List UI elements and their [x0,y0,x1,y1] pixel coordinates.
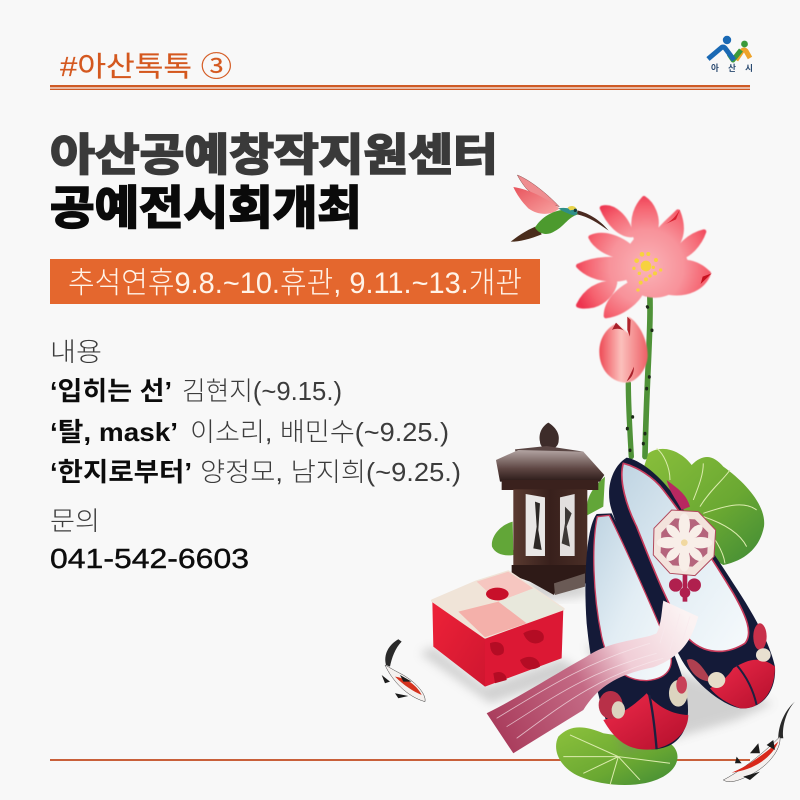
content heading: 내용 [50,337,102,367]
exhibition 3 [50,457,461,487]
holiday notice banner: 추석연휴9.8.~10.휴관, 9.11.~13.개관 [68,267,522,300]
exhibition 2: ‘탈, mask’ [50,417,178,447]
exhibition 3: 양정모, 남지희(~9.25.) [200,457,461,487]
title [50,131,498,234]
logo: Asan city [708,36,753,73]
title: 공예전시회개최 [50,182,362,234]
illustration: bottom composition [382,423,795,785]
lily pad under shoes [556,727,678,785]
gift box [420,572,583,703]
illustration: lotus bud [599,317,648,383]
stamens [632,252,662,292]
front shoe [585,513,688,750]
header double rule [50,85,750,90]
illustration: hummingbird [511,175,609,242]
koi fish right [723,702,795,782]
hashtag heading: #아산톡톡 ③ [60,51,232,82]
exhibition 1: 김현지(~9.15.) [182,376,342,406]
beak [577,210,609,231]
shoe shadow [587,643,773,753]
phone number: 041-542-6603 [50,543,249,574]
lily pad behind lantern [492,477,605,555]
body [535,210,578,234]
back shoe [609,458,775,708]
lantern [496,423,604,599]
logo: Asan city: 아산시 [711,63,753,73]
exhibition 2: 이소리, 배민수(~9.25.) [190,417,449,447]
footer rule [50,759,750,761]
tassel [487,601,698,753]
illustration: lotus stems [627,284,652,457]
title: 아산공예창작지원센터 [50,131,498,180]
exhibition 1 [50,376,342,406]
inquiry heading: 문의 [50,506,100,536]
exhibition 3: ‘한지로부터’ [50,457,192,487]
lily pad behind shoes [630,448,764,565]
exhibition 1: ‘입히는 선’ [50,376,172,406]
koi fish left [382,639,425,702]
norigae ornament [653,480,716,602]
tail [511,226,542,242]
wings [517,175,559,207]
illustration: lotus flower [578,198,712,316]
exhibition 2 [50,417,449,447]
